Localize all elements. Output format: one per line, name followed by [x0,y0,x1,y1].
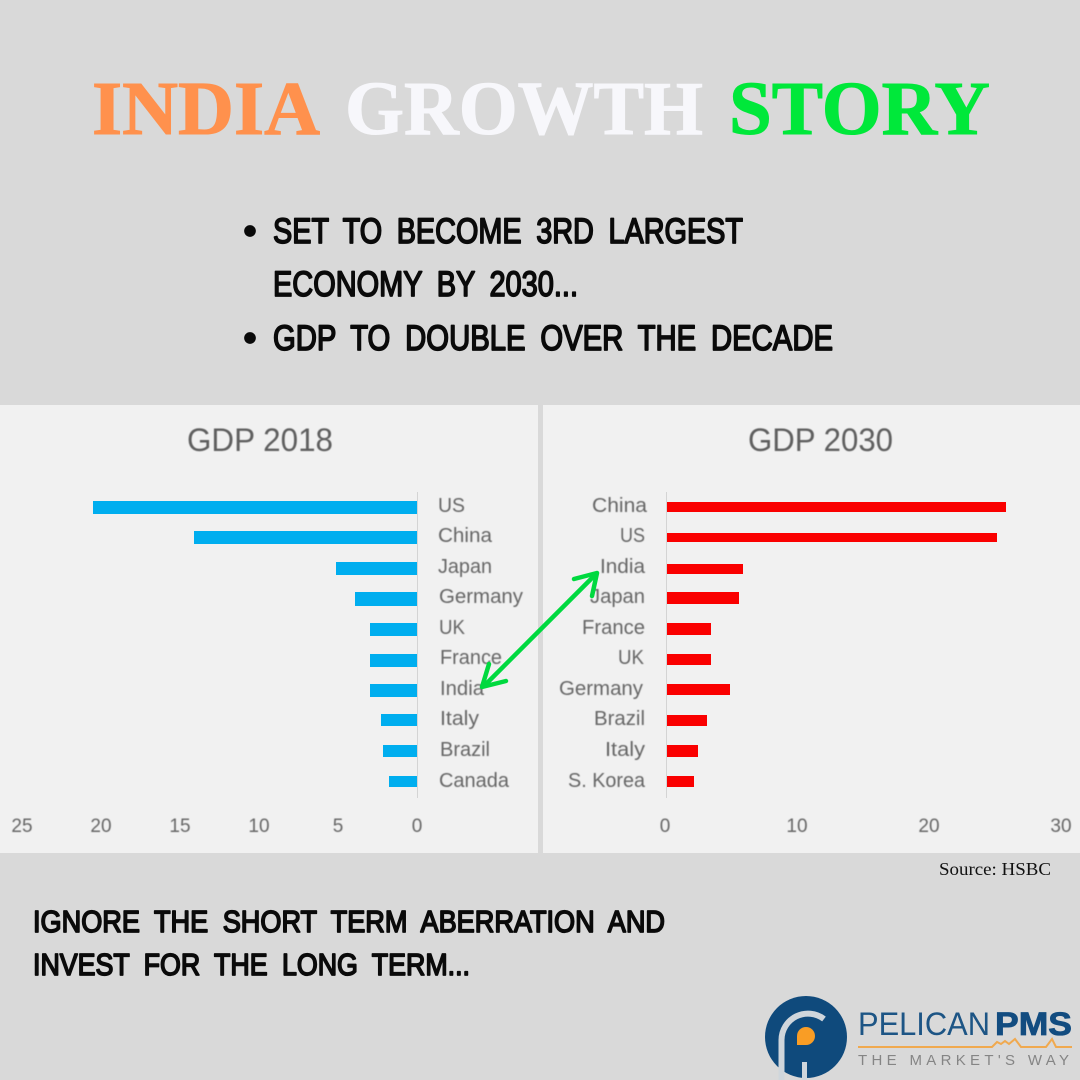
category labels: 2018: Italy [440,708,479,730]
axis labels: 2018: 10 [248,816,270,837]
category labels: 2018: Canada [439,770,510,792]
orange market line [858,1039,1072,1047]
title: INDIA [92,67,320,151]
category labels: 2030: India [600,556,646,578]
category labels: 2018: Brazil [440,739,490,761]
axis labels: 2030: 10 [786,816,808,837]
bullet points [245,212,833,358]
axis labels: 2018: 15 [169,816,191,837]
closing message [33,904,665,982]
title: STORY [729,67,990,151]
category labels: 2018: UK [439,617,466,639]
category labels: 2030: China [592,495,648,517]
arrow: India rank change [482,573,597,687]
panel: GDP 2018 chart [0,405,538,853]
logo: Pelican PMS [765,996,1072,1080]
axis labels: 2018: 5 [333,816,343,837]
axis labels: 2018: 0 [412,816,422,837]
title [92,67,990,151]
bullet points: ECONOMY BY 2030... [273,265,578,304]
bars: 2018 GDP [93,501,417,787]
category labels: 2030: Brazil [594,708,645,730]
category labels: 2030: Germany [559,678,643,700]
source note: Source: HSBC [939,859,1051,879]
panel: GDP 2030 chart [543,405,1080,853]
axis labels: 2030: 30 [1050,816,1072,837]
bullet points: GDP TO DOUBLE OVER THE DECADE [273,319,833,358]
category labels: 2030: France [582,617,645,639]
bullet points: SET TO BECOME 3RD LARGEST [273,212,743,251]
category labels: 2030: S. Korea [568,770,646,792]
category labels: 2030: US [620,525,645,547]
category labels: 2018 [438,495,523,792]
title: GROWTH [345,67,703,151]
category labels: 2018: Japan [438,556,492,578]
axis labels: 2030 [660,816,1072,837]
heading: GDP 2030: GDP 2030 [748,422,893,458]
axis labels: 2030: 0 [660,816,670,837]
category labels: 2030 [559,495,648,792]
axis labels: 2018 [11,816,422,837]
tagline: THE MARKET'S WAY [858,1052,1069,1069]
category labels: 2030: Italy [605,739,645,761]
logo: Pelican PMS: PMS [995,1006,1072,1042]
wordmark: PELICAN [858,1006,990,1042]
closing message: INVEST FOR THE LONG TERM... [33,947,470,982]
category labels: 2018: India [440,678,485,700]
category labels: 2030: UK [618,647,645,669]
icon: P emblem [765,996,847,1080]
heading: GDP 2018: GDP 2018 [187,422,333,458]
category labels: 2030: Japan [590,586,645,608]
category labels: 2018: France [440,647,502,669]
category labels: 2018: US [438,495,465,517]
category labels: 2018: Germany [439,586,523,608]
axis labels: 2018: 25 [11,816,33,837]
category labels: 2018: China [438,525,493,547]
closing message: IGNORE THE SHORT TERM ABERRATION AND [33,904,665,939]
axis labels: 2018: 20 [90,816,112,837]
axis labels: 2030: 20 [918,816,940,837]
bars: 2030 GDP [667,502,1006,787]
